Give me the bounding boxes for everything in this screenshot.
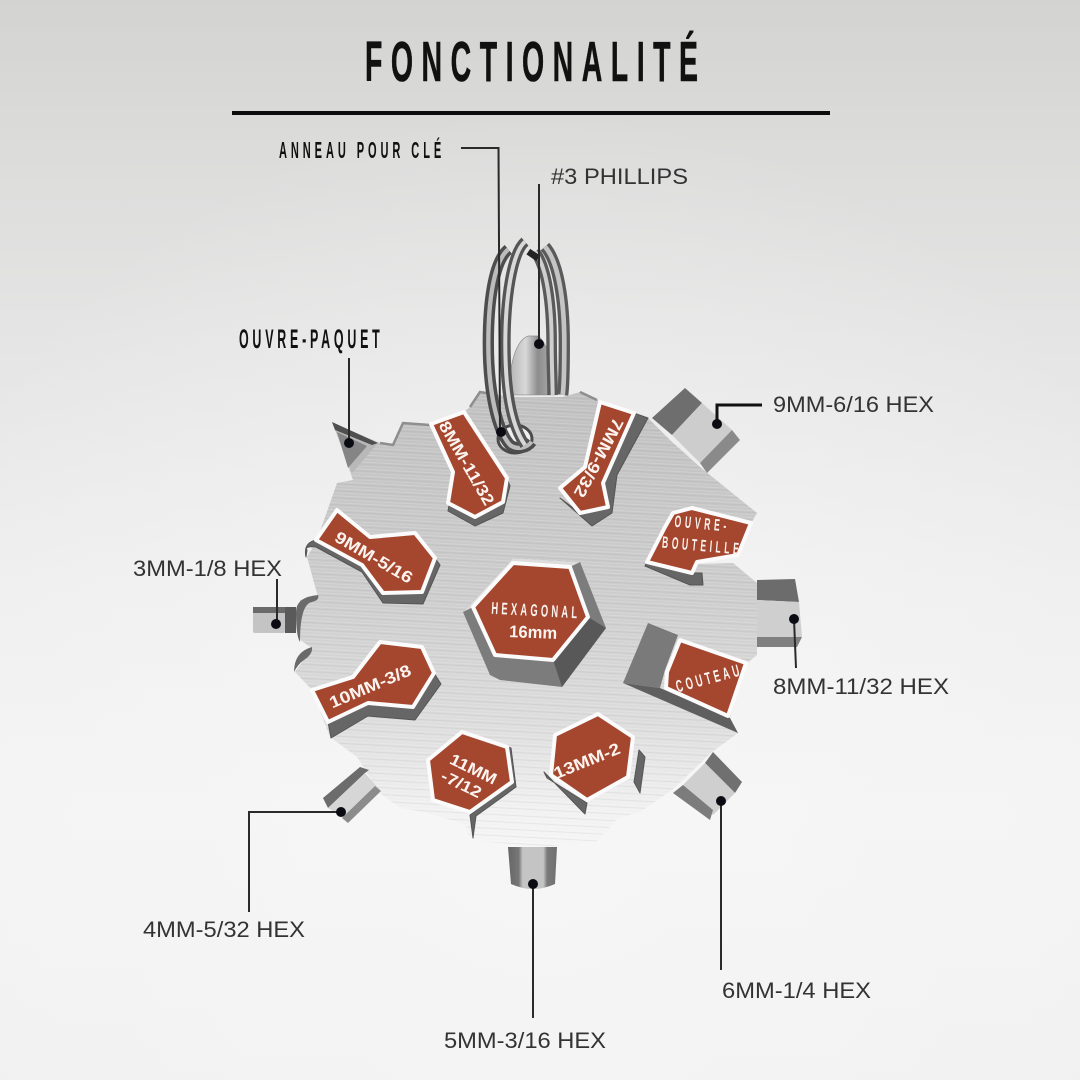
panel: ouvre-bouteille slot: BOUTEILLE <box>661 533 740 558</box>
panel: central hexagon: 16mm <box>509 622 558 643</box>
icon: 9mm hex tool <box>652 388 740 473</box>
callout: anneau pour clé: ANNEAU POUR CLÉ <box>279 136 441 163</box>
panel: 11MM-7/12 slot: -7/12 <box>438 768 484 802</box>
callout: 6mm-1/4 hex: 6MM-1/4 HEX <box>722 978 871 1003</box>
panel: 7MM-9/32 slot: 7MM-9/32 <box>570 415 626 500</box>
icon: key hole <box>498 425 532 453</box>
callout: 4mm-5/32 hex <box>143 807 346 942</box>
title <box>232 29 830 115</box>
callout: 6mm-1/4 hex <box>716 796 871 1003</box>
callout: #3 phillips: #3 PHILLIPS <box>551 164 688 189</box>
panel: 10MM-3/8 slot <box>312 642 441 738</box>
callout: ouvre-paquet: OUVRE-PAQUET <box>239 325 380 354</box>
icon: 4mm hex tool <box>323 767 381 823</box>
panel: couteau slot: COUTEAU <box>674 661 741 696</box>
callout: ouvre-paquet <box>239 325 380 448</box>
callout: 8mm-11/32 hex: 8MM-11/32 HEX <box>773 674 949 699</box>
callout: 9mm-6/16 hex: 9MM-6/16 HEX <box>773 392 934 417</box>
panel: 11MM-7/12 slot: 11MM <box>447 751 499 789</box>
callout: 3mm-1/8 hex <box>133 556 282 629</box>
callout: 9mm-6/16 hex <box>712 392 934 429</box>
panel: ouvre-bouteille slot: OUVRE- <box>674 512 727 535</box>
panel: 10MM-3/8 slot: 10MM-3/8 <box>327 662 414 712</box>
panel: 8MM-11/32 slot <box>431 412 510 526</box>
callout: 5mm-3/16 hex: 5MM-3/16 HEX <box>444 1028 606 1053</box>
icon: key rings and phillips bit <box>510 247 564 395</box>
callout: #3 phillips <box>534 164 688 349</box>
callout: 3mm-1/8 hex: 3MM-1/8 HEX <box>133 556 282 581</box>
callout: 4mm-5/32 hex: 4MM-5/32 HEX <box>143 917 305 942</box>
panel: central hexagon <box>463 558 606 687</box>
icon: 8mm hex tool <box>757 579 802 647</box>
panel: central hexagon: HEXAGONAL <box>491 599 578 622</box>
icon: 6mm hex tool <box>673 752 742 820</box>
panel: couteau slot <box>623 623 746 733</box>
panel: 9MM-5/16 slot <box>305 510 440 604</box>
body: multi-tool <box>295 392 757 847</box>
panel: 13MM-2 slot: 13MM-2 <box>551 740 623 783</box>
callout: 8mm-11/32 hex <box>773 614 949 699</box>
callout: anneau pour clé <box>279 136 506 437</box>
panel: 8MM-11/32 slot: 8MM-11/32 <box>435 418 497 509</box>
panel: 13MM-2 slot <box>544 714 645 814</box>
panel: 9MM-5/16 slot: 9MM-5/16 <box>331 528 416 587</box>
panel: 7MM-9/32 slot <box>560 402 648 526</box>
icon: package opener <box>332 422 378 473</box>
title: FONCTIONALITÉ <box>365 29 698 94</box>
callout: 5mm-3/16 hex <box>444 879 606 1053</box>
icon: key rings front <box>488 242 538 448</box>
icon: 5mm hex tool <box>508 847 557 889</box>
panel: ouvre-bouteille slot <box>645 508 751 585</box>
icon: 3mm hex tool <box>253 595 318 672</box>
panel: 11MM-7/12 slot <box>428 732 516 838</box>
